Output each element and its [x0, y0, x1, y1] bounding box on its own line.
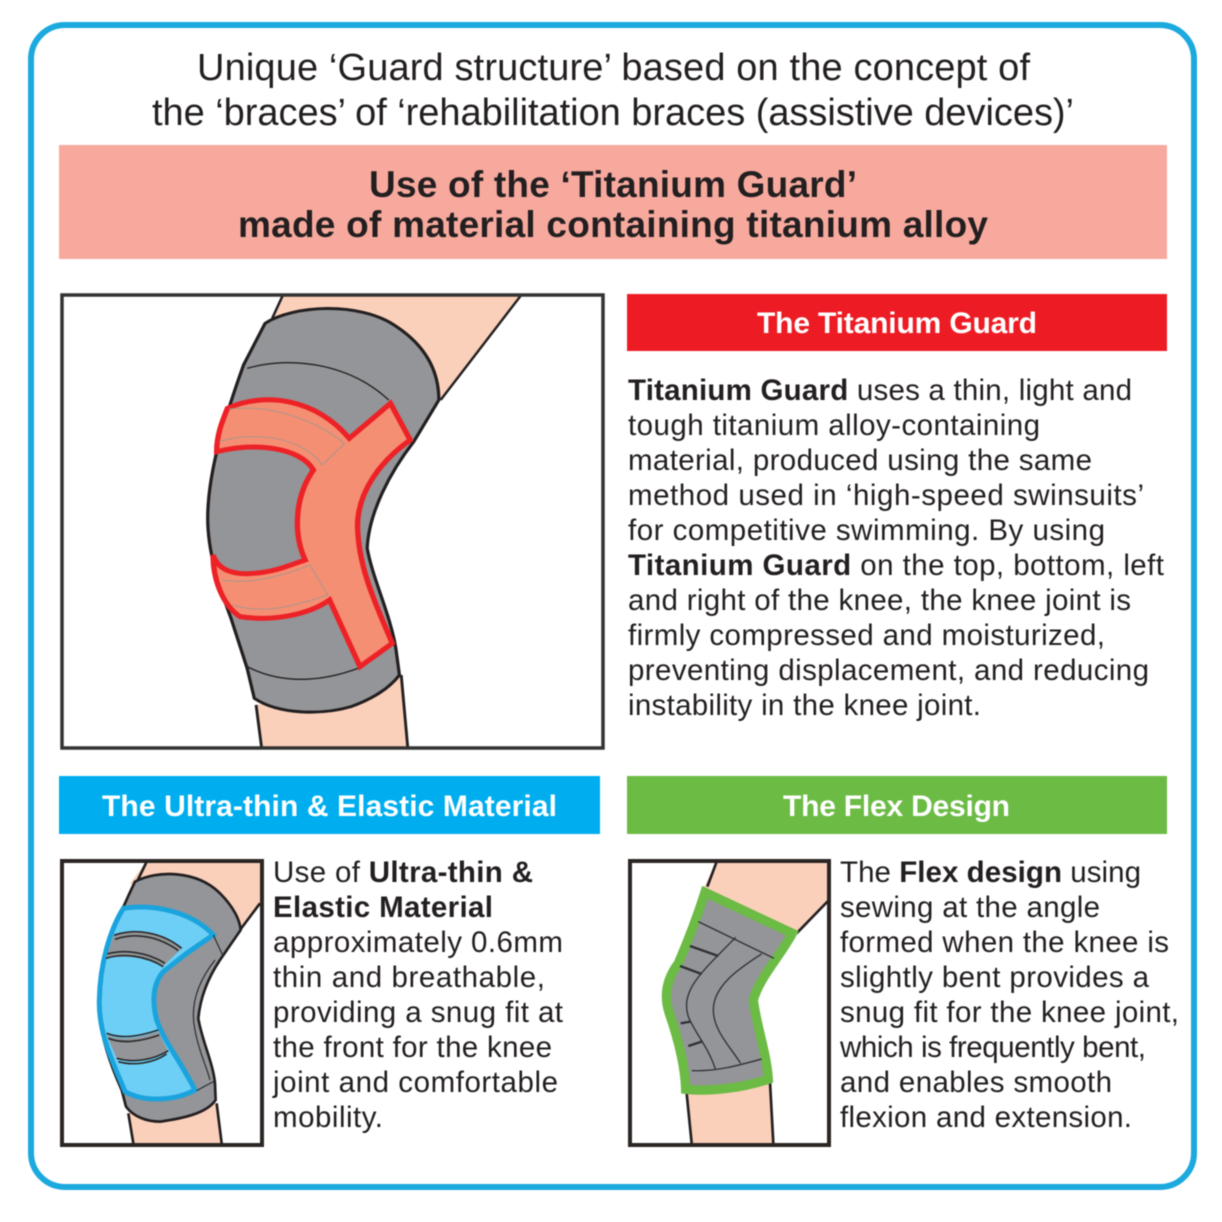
text block: flex design description: sewing at the angle [840, 891, 1100, 924]
text block: titanium guard description: Titanium Guard uses a thin, light and [628, 374, 1132, 407]
header: ultra-thin and elastic material [59, 776, 600, 834]
text block: ultra-thin material description: joint and comfortable [272, 1066, 558, 1099]
text block: ultra-thin material description: thin and breathable, [273, 961, 545, 994]
banner: titanium guard headline: made of material containing titanium alloy [238, 204, 988, 245]
banner: titanium guard headline: Use of the ‘Titanium Guard’ [369, 164, 857, 205]
header: ultra-thin and elastic material: The Ultra-thin & Elastic Material [102, 790, 557, 823]
title: Unique ‘Guard structure’ based on the concept of [197, 47, 1030, 89]
text block: flex design description: snug fit for the knee joint, [840, 996, 1179, 1029]
text block: titanium guard description: instability in the knee joint. [628, 689, 981, 722]
header: the flex design: The Flex Design [783, 790, 1010, 823]
text block: titanium guard description: preventing displacement, and reducing [628, 654, 1149, 687]
text block: ultra-thin material description: approximately 0.6mm [273, 926, 563, 959]
text block: titanium guard description [628, 374, 1164, 722]
header: the titanium guard: The Titanium Guard [757, 307, 1037, 340]
text block: flex design description: formed when the knee is [840, 926, 1169, 959]
text block: ultra-thin material description: the front for the knee [273, 1031, 552, 1064]
text block: titanium guard description: Titanium Guard on the top, bottom, left [628, 549, 1164, 582]
text block: titanium guard description: tough titanium alloy-containing [628, 409, 1040, 442]
header: the titanium guard [627, 294, 1167, 351]
illustration: knee brace with elastic material in blue [62, 861, 262, 1145]
title: the ‘braces’ of ‘rehabilitation braces (assistive devices)’ [152, 92, 1074, 134]
text block: flex design description [839, 856, 1179, 1134]
text block: titanium guard description: firmly compressed and moisturized, [628, 619, 1105, 652]
text block: flex design description: The Flex design using [840, 856, 1141, 889]
text block: ultra-thin material description: Elastic Material [273, 891, 493, 924]
text block: flex design description: and enables smooth [840, 1066, 1112, 1099]
text block: titanium guard description: material, produced using the same [628, 444, 1092, 477]
illustration: knee brace with titanium guard in red [62, 295, 603, 748]
banner: titanium guard headline [59, 145, 1167, 259]
text block: ultra-thin material description [272, 856, 563, 1134]
text block: flex design description: flexion and extension. [840, 1101, 1132, 1134]
illustration: knee brace with flex design outlined in green [630, 861, 829, 1145]
text block: flex design description: slightly bent provides a [840, 961, 1150, 994]
text block: flex design description: which is frequently bent, [839, 1031, 1146, 1064]
text block: ultra-thin material description: Use of Ultra-thin & [273, 856, 533, 889]
text block: titanium guard description: and right of the knee, the knee joint is [628, 584, 1131, 617]
text block: ultra-thin material description: mobility. [273, 1101, 383, 1134]
title [152, 47, 1074, 134]
text block: titanium guard description: method used in ‘high-speed swinsuits’ [628, 479, 1144, 512]
header: the flex design [627, 776, 1167, 834]
text block: titanium guard description: for competitive swimming. By using [628, 514, 1105, 547]
text block: ultra-thin material description: providing a snug fit at [273, 996, 563, 1029]
